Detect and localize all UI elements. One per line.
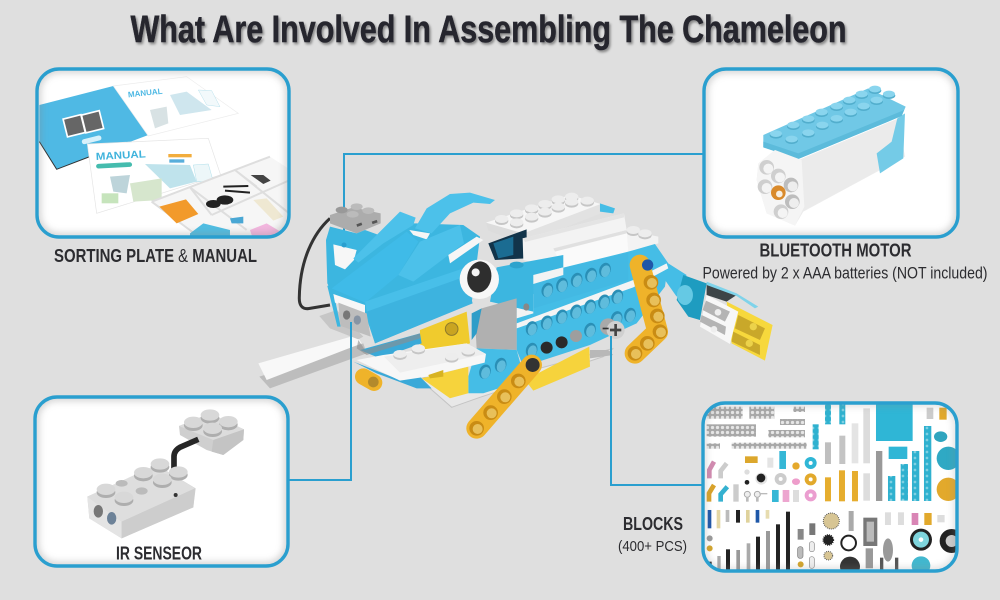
body blue panels	[490, 244, 668, 367]
title: What Are Involved In Assembling The Chameleon	[130, 9, 846, 51]
left foot liftarm	[363, 377, 374, 383]
white stacked beams	[523, 213, 658, 269]
panel: sorting plate and manual	[37, 69, 293, 240]
cable	[299, 218, 330, 309]
chameleon model	[258, 193, 773, 436]
eye	[460, 259, 499, 299]
head	[326, 193, 495, 343]
lower blue chunk and yellow block	[468, 348, 525, 393]
connector line: IR sensor to chameleon	[288, 322, 351, 480]
small plate beside face	[319, 310, 363, 339]
manual booklet: MANUAL	[96, 149, 146, 163]
connector line: blocks to chameleon	[611, 336, 703, 485]
rear leg liftarm	[628, 259, 667, 361]
IR sensor illustration	[87, 409, 244, 538]
white front plate	[357, 343, 486, 381]
front leg liftarm	[469, 358, 540, 436]
panel: blocks	[703, 403, 964, 577]
manual booklet	[39, 77, 238, 213]
beam tongue	[259, 343, 367, 388]
connector line: motor to chameleon	[344, 154, 704, 245]
panel inner shadow	[703, 403, 957, 571]
tail joint	[665, 263, 687, 297]
connector end dot	[342, 242, 346, 248]
label: bluetooth motor: BLUETOOTH MOTOR	[760, 240, 912, 260]
yellow belly and blue strip	[422, 367, 468, 398]
sorting tray	[152, 157, 293, 240]
grey wedge	[475, 298, 517, 350]
panel: IR sensor	[35, 397, 288, 566]
base plate	[417, 348, 613, 407]
yellow tail bricks	[700, 295, 773, 361]
sensor brick on head	[330, 203, 381, 233]
manual booklet: MANUAL	[128, 87, 163, 99]
label: sorting plate and manual: SORTING PLATE & MANUAL	[54, 245, 257, 266]
blocks layout	[707, 403, 964, 577]
panel inner shadow	[704, 69, 958, 237]
motor illustration	[757, 86, 906, 226]
white top bricks	[486, 193, 615, 244]
panel inner shadow	[35, 397, 288, 566]
panel inner shadow	[37, 69, 289, 237]
label: blocks: BLOCKS	[623, 514, 683, 534]
label: IR sensor: IR SENSEOR	[116, 542, 202, 564]
motor window	[488, 229, 527, 260]
axle pin	[600, 318, 625, 339]
panel: bluetooth motor	[704, 69, 958, 237]
note: piece count: (400+ PCS)	[618, 538, 687, 555]
